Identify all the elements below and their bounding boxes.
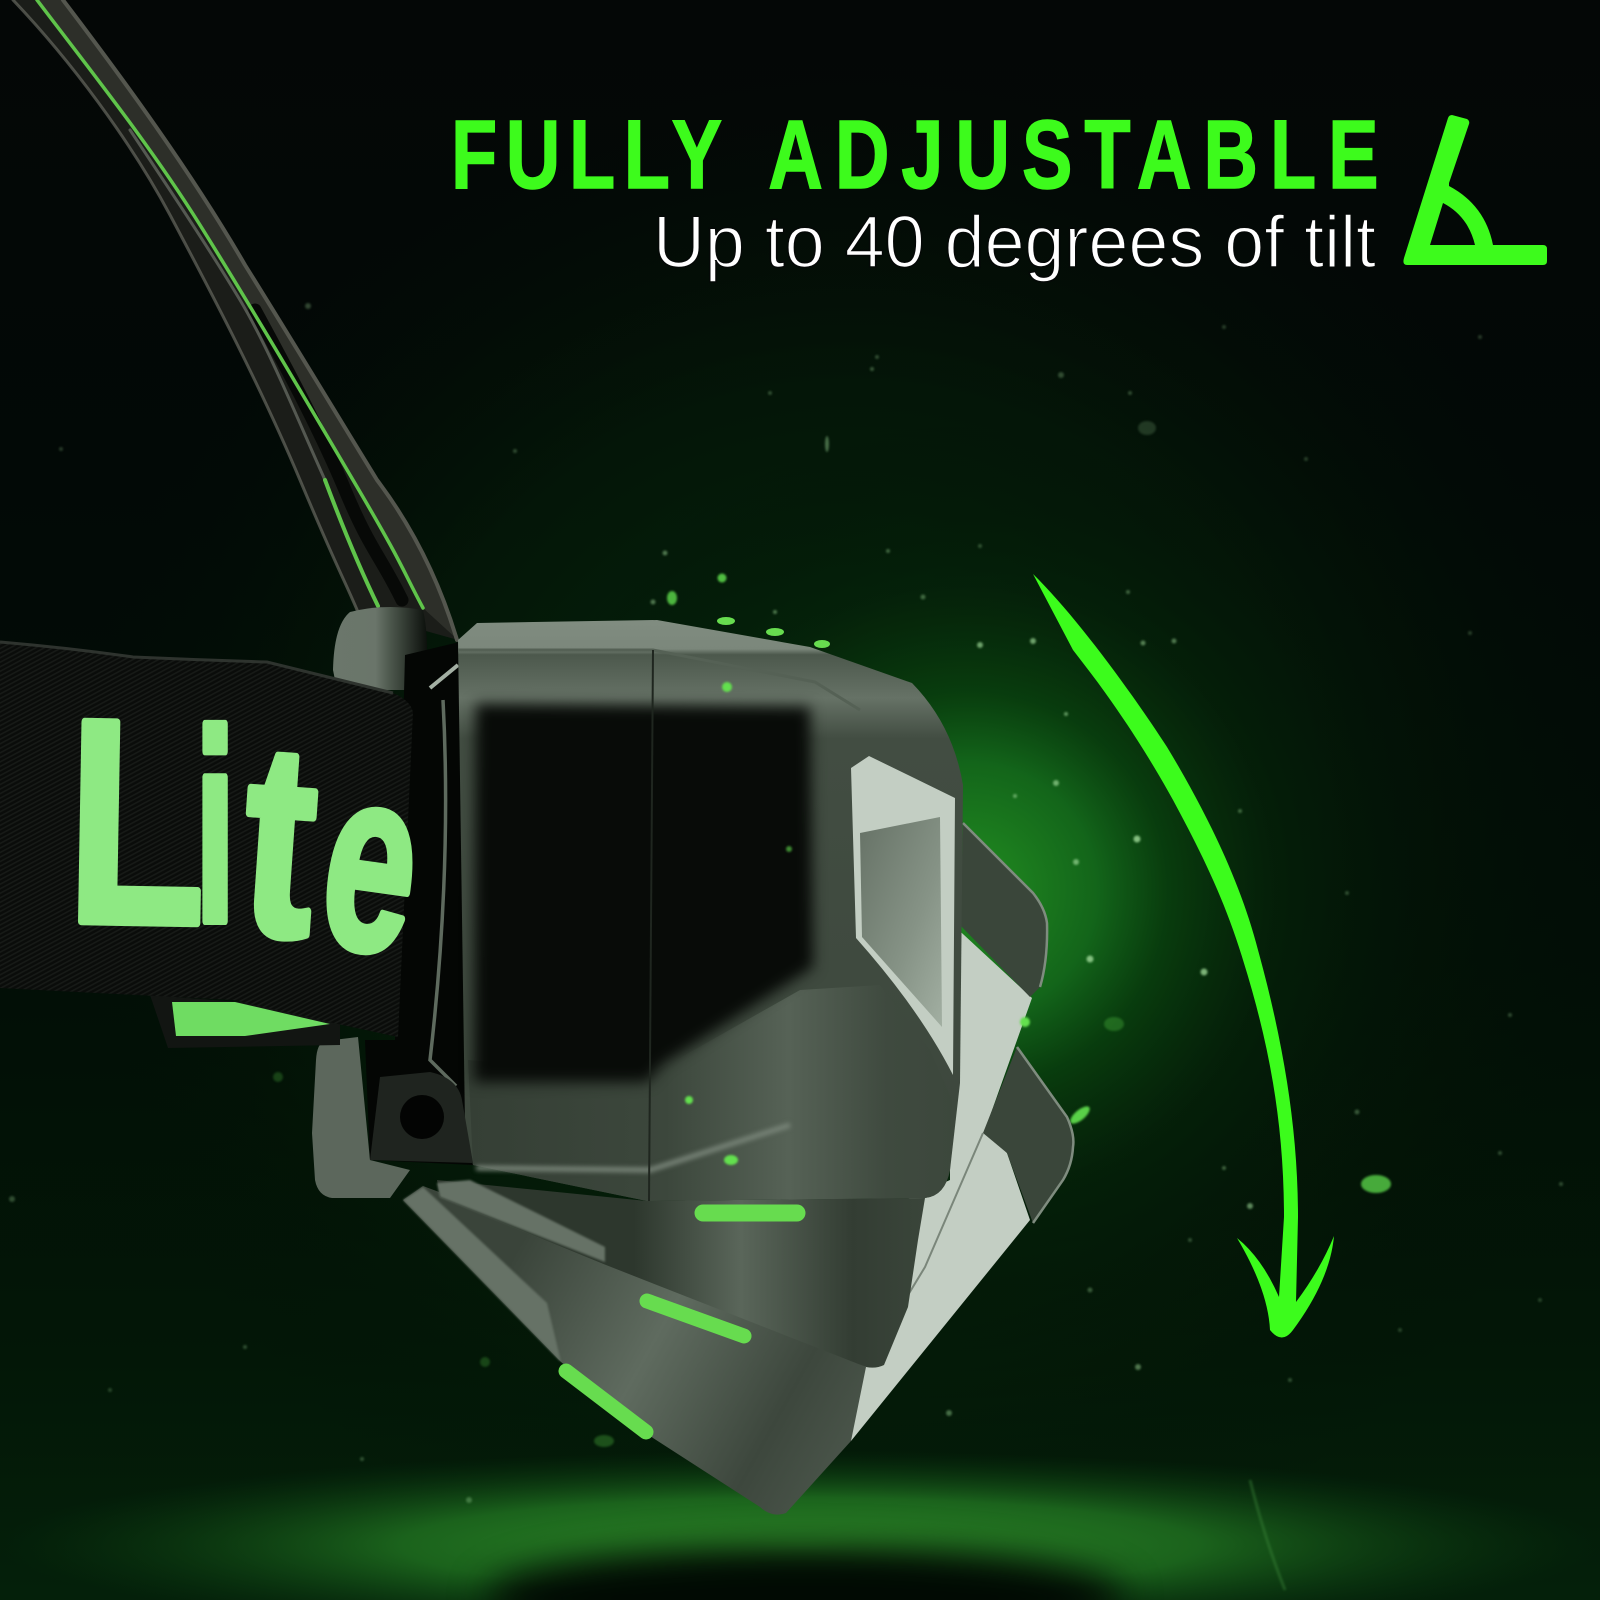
tilted lamp lenses backing: [845, 922, 1032, 1441]
particles over housing: [685, 682, 1030, 1165]
tilted lamp position 2: [437, 823, 1047, 1368]
lens inner: [860, 817, 942, 1027]
floating green particles: [9, 303, 1563, 1503]
housing 3 edge strip: [403, 1187, 561, 1362]
icon: angle tilt: [1403, 115, 1547, 265]
lamp main housing: [458, 617, 1030, 1201]
rear cap 2 rim: [963, 823, 1047, 987]
fabric headband: [0, 642, 437, 1037]
strap lettering: e: [307, 711, 437, 1009]
headlamp product illustration: [0, 0, 1073, 1515]
strap lettering: i: [194, 674, 236, 979]
subtitle: Up to 40 degrees of tilt: [653, 202, 1376, 283]
lens seam: [905, 1133, 983, 1300]
pivot hinge: [370, 1072, 473, 1163]
rear cap 3: [983, 1047, 1073, 1223]
green button 3: [566, 1371, 646, 1432]
tucked strap end with green patch: [150, 995, 340, 1048]
green button 1: [703, 1204, 797, 1222]
head strap cords: [13, 0, 458, 640]
housing 2 edge strip: [437, 1180, 605, 1262]
rear cap 2: [960, 823, 1047, 997]
lens window: [851, 756, 955, 1075]
title: FULLY ADJUSTABLE: [451, 101, 1391, 209]
lower bracket: [312, 1037, 410, 1198]
underside lip highlight: [476, 1125, 790, 1170]
black mount strip: [365, 640, 473, 1165]
housing 3: [403, 1186, 866, 1515]
rear cap 3 rim: [1017, 1047, 1073, 1223]
green button 2: [647, 1301, 744, 1336]
green top buttons: [717, 617, 830, 648]
upper bracket: [333, 607, 427, 690]
tilted lamp position 3: [403, 1047, 1073, 1515]
lower housing band: [468, 985, 952, 1201]
strap lettering: t: [234, 686, 326, 996]
dark side panel: [474, 704, 813, 1082]
housing 2: [437, 1180, 925, 1368]
arrow: downward tilt: [1033, 574, 1334, 1338]
strap lettering: L: [65, 660, 209, 986]
strap lettering: [65, 660, 437, 1009]
